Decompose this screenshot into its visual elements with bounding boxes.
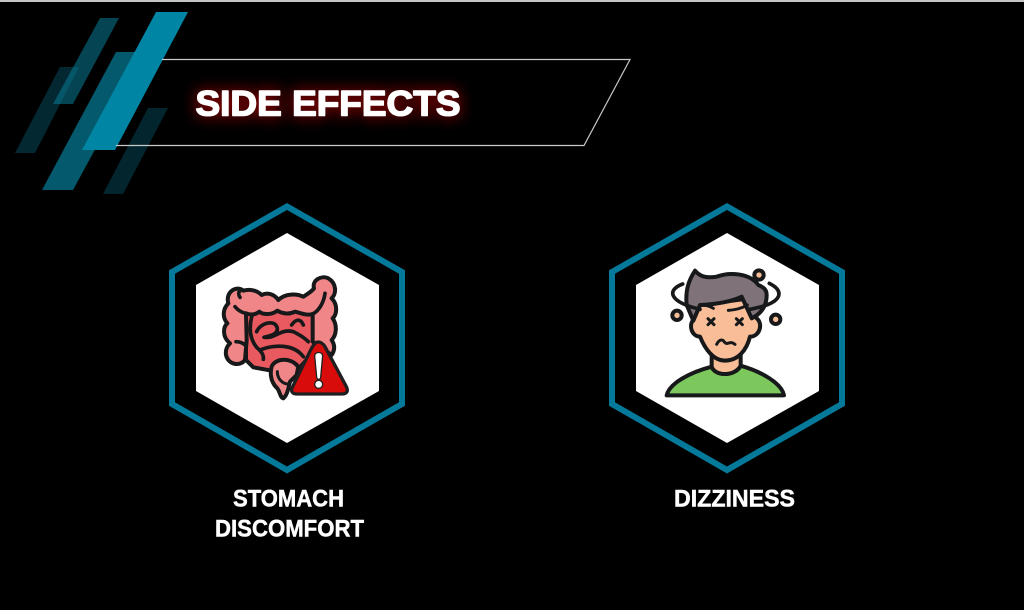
title: SIDE EFFECTS (196, 84, 460, 124)
label: dizziness: DIZZINESS (674, 486, 795, 512)
icon: dizzy man (667, 270, 784, 395)
orbit ring (673, 283, 779, 309)
warning triangle (292, 342, 347, 394)
hexagon frame (612, 206, 842, 470)
decorative slanted bars (15, 12, 188, 194)
dizzy orbs (754, 270, 764, 280)
white hexagon (636, 233, 819, 443)
title banner (116, 60, 630, 146)
panel: stomach discomfort (172, 206, 402, 542)
exclamation mark (315, 352, 323, 379)
head (691, 298, 760, 361)
label: stomach discomfort (215, 486, 364, 542)
small intestine (246, 310, 314, 371)
neck (712, 353, 741, 374)
hexagon frame (172, 206, 402, 470)
icon: intestines with warning sign (224, 277, 347, 398)
white hexagon (196, 233, 379, 443)
eyes and mouth (708, 319, 742, 325)
panel: dizziness (612, 206, 842, 512)
label: stomach discomfort: DISCOMFORT (215, 516, 364, 542)
title banner: SIDE EFFECTS (195, 83, 461, 124)
rectum and appendix (271, 360, 298, 398)
label: stomach discomfort: STOMACH (233, 486, 344, 512)
eyebrows (700, 305, 747, 310)
large intestine (224, 277, 336, 364)
shirt (667, 366, 784, 395)
hair (686, 271, 767, 321)
